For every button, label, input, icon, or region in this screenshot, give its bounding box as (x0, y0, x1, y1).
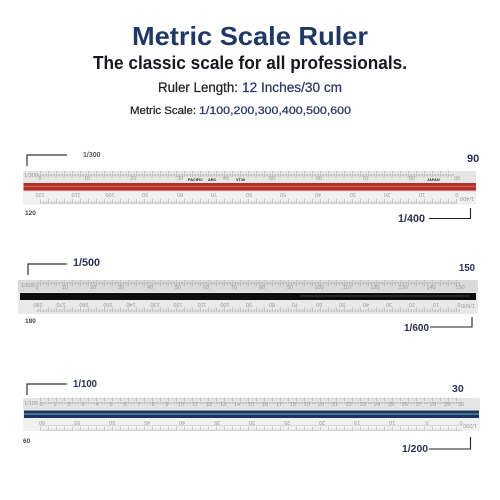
label: 180: 180 (25, 318, 36, 325)
scale numbers: 120 (35, 191, 45, 197)
scale numbers (21, 283, 475, 308)
scale numbers: 40 (315, 191, 321, 197)
scale numbers: 0 (459, 419, 463, 425)
callout: 1/200: 1/200 (402, 443, 428, 455)
scale numbers: 1/300 (24, 173, 38, 179)
scale numbers: 30 (177, 176, 183, 182)
ruler body (23, 398, 480, 431)
scale numbers: 80 (177, 191, 183, 197)
scale numbers: 10 (433, 301, 439, 307)
scale numbers: 160 (79, 301, 89, 307)
scale numbers: 30 (386, 301, 392, 307)
scale numbers: 55 (74, 419, 80, 425)
navy band (24, 410, 479, 418)
scale numbers: 80 (269, 301, 275, 307)
callout: 1/100 (27, 378, 97, 395)
callout: 1/600: 1/600 (404, 323, 429, 334)
scale numbers (24, 173, 474, 201)
callout: 1/500 (28, 257, 100, 275)
scale numbers: 150 (103, 301, 113, 307)
scale numbers: 23 (360, 402, 366, 408)
scale numbers: 21 (332, 402, 338, 408)
scale numbers: 60 (203, 285, 209, 291)
callout: 1/400: 1/400 (398, 213, 425, 225)
scale numbers: 10 (178, 402, 184, 408)
scale numbers: 1/100 (24, 401, 38, 407)
scale numbers: 5 (425, 419, 429, 425)
scale numbers: 100 (314, 285, 324, 291)
scale numbers: 6 (123, 402, 127, 408)
ruler body (23, 171, 476, 204)
scale numbers: 120 (370, 285, 380, 291)
maker imprint: ARC (208, 178, 216, 182)
scale numbers: 130 (150, 301, 160, 307)
scale numbers: 45 (144, 419, 150, 425)
scale numbers: 30 (350, 191, 356, 197)
scale numbers: 50 (280, 191, 286, 197)
title: Metric Scale Ruler (132, 21, 368, 51)
callout: 1/400 (398, 208, 470, 225)
scale numbers: 20 (409, 301, 415, 307)
scale numbers: 24 (374, 402, 380, 408)
scale numbers: 35 (214, 419, 220, 425)
scale numbers: 50 (109, 419, 115, 425)
scale numbers: 40 (363, 301, 369, 307)
scale numbers: 140 (126, 301, 136, 307)
scale numbers: 130 (398, 285, 408, 291)
scale numbers: 30 (249, 419, 255, 425)
scale numbers: 100 (220, 301, 230, 307)
label: 60: 60 (23, 438, 31, 445)
header text block (93, 21, 407, 117)
scale numbers: 60 (316, 176, 322, 182)
label: 150: 150 (459, 262, 475, 274)
scale numbers: 29 (444, 402, 450, 408)
ruler body (18, 280, 478, 314)
scale numbers: 110 (343, 285, 351, 291)
scale numbers: 40 (223, 176, 229, 182)
callout: 1/200 (402, 437, 470, 455)
callout: 1/600 (404, 317, 472, 334)
callout: 1/300: 1/300 (83, 152, 101, 159)
scale numbers: 10 (62, 285, 68, 291)
scale numbers: 50 (339, 301, 345, 307)
scale numbers: 1 (53, 402, 57, 408)
scale numbers: 70 (292, 301, 298, 307)
scale numbers: 70 (362, 176, 368, 182)
scale numbers: 20 (384, 191, 390, 197)
scale numbers: 80 (409, 176, 415, 182)
metric scale spec: Metric Scale: (130, 105, 196, 117)
panel: red ruler (23, 171, 476, 204)
black band (20, 293, 476, 300)
scale numbers: 30 (458, 402, 464, 408)
scale numbers: 14 (234, 402, 240, 408)
scale numbers: 18 (290, 402, 296, 408)
scale numbers: 50 (175, 285, 181, 291)
scale numbers: 2 (67, 402, 71, 408)
maker imprint: JAPAN (427, 178, 440, 182)
scale numbers: 40 (147, 285, 153, 291)
scale numbers: 1/200 (463, 422, 477, 428)
scale numbers: 0 (457, 301, 461, 307)
scale numbers: 9 (165, 402, 169, 408)
callout: 1/100: 1/100 (73, 378, 97, 390)
scale numbers: 17 (276, 402, 282, 408)
scale numbers: 28 (430, 402, 436, 408)
scale numbers: 140 (426, 285, 436, 291)
scale numbers: 120 (173, 301, 183, 307)
panel: black ruler (18, 280, 478, 314)
scale numbers: 60 (246, 191, 252, 197)
scale numbers: 0 (455, 191, 459, 197)
maker imprint (188, 178, 440, 182)
scale numbers: 10 (84, 176, 90, 182)
callout: 1/300 (27, 152, 101, 166)
label: 90: 90 (467, 153, 479, 165)
scale numbers: 13 (220, 402, 226, 408)
scale numbers: 7 (137, 402, 141, 408)
scale numbers: 70 (211, 191, 217, 197)
scale numbers: 90 (142, 191, 148, 197)
scale numbers: 30 (118, 285, 124, 291)
scale numbers: 170 (56, 301, 66, 307)
ruler length spec: 12 Inches/30 cm (242, 80, 342, 95)
scale numbers: 25 (388, 402, 394, 408)
scale numbers: 26 (402, 402, 408, 408)
scale numbers: 80 (259, 285, 265, 291)
scale numbers: 70 (231, 285, 237, 291)
scale numbers: 20 (90, 285, 96, 291)
scale numbers: 50 (269, 176, 275, 182)
scale numbers: 12 (206, 402, 212, 408)
scale numbers: 1/400 (460, 195, 474, 201)
scale numbers: 20 (130, 176, 136, 182)
scale numbers: 180 (33, 301, 43, 307)
scale numbers: 10 (419, 191, 425, 197)
scale numbers: 1/600 (461, 302, 475, 308)
scale numbers: 4 (95, 402, 99, 408)
scale numbers: 0 (39, 402, 43, 408)
scale numbers: 90 (246, 301, 252, 307)
ruler length spec (158, 80, 342, 95)
scale numbers: 27 (416, 402, 422, 408)
scale numbers: 22 (346, 402, 352, 408)
red band (24, 183, 476, 192)
scale numbers: 10 (389, 419, 395, 425)
label: 30: 30 (452, 383, 464, 395)
scale numbers: 5 (109, 402, 113, 408)
scale numbers: 8 (151, 402, 155, 408)
scale numbers: 16 (262, 402, 268, 408)
scale numbers (24, 401, 477, 428)
scale numbers: 90 (287, 285, 293, 291)
panel: blue ruler (23, 398, 480, 431)
scale numbers: 20 (318, 402, 324, 408)
label: 120: 120 (25, 210, 36, 217)
scale numbers: 25 (284, 419, 290, 425)
ruler length spec: Ruler Length: (158, 80, 238, 95)
maker imprint: PACIFIC (188, 178, 203, 182)
scale numbers: 150 (455, 285, 465, 291)
subtitle: The classic scale for all professionals. (93, 53, 407, 73)
maker imprint: VT30 (236, 178, 245, 182)
callout: 1/500: 1/500 (73, 257, 100, 269)
scale numbers: 20 (319, 419, 325, 425)
scale numbers: 100 (105, 191, 115, 197)
scale numbers: 15 (354, 419, 360, 425)
scale numbers: 11 (192, 402, 198, 408)
scale numbers: 60 (39, 419, 45, 425)
metric scale spec (130, 105, 351, 117)
scale numbers: 110 (198, 301, 206, 307)
scale numbers: 0 (35, 285, 39, 291)
scale numbers: 0 (38, 176, 42, 182)
scale numbers: 40 (179, 419, 185, 425)
scale numbers: 110 (72, 191, 80, 197)
scale numbers: 15 (248, 402, 254, 408)
scale numbers: 19 (304, 402, 310, 408)
metric scale spec: 1/100,200,300,400,500,600 (199, 105, 351, 117)
scale numbers: 3 (81, 402, 85, 408)
scale numbers: 1/500 (21, 283, 35, 289)
scale numbers: 60 (316, 301, 322, 307)
scale numbers: 90 (454, 176, 460, 182)
